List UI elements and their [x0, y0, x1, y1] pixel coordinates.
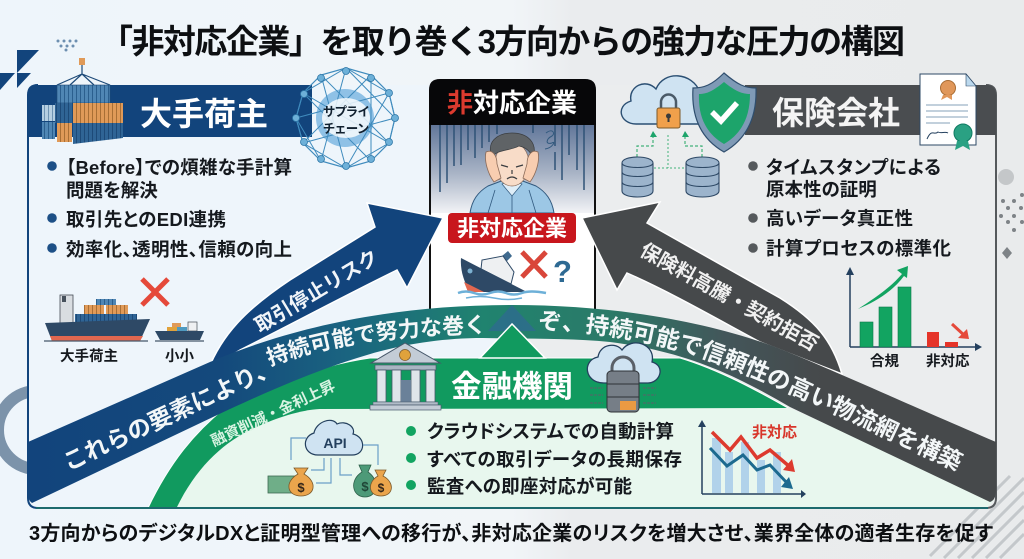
panel: 保険会社: [621, 73, 996, 370]
保険会社 heading: 保険会社: [772, 95, 900, 131]
icon: supply chain network: チェーン: [323, 122, 369, 136]
保険会社 bullet list: 計算プロセスの標準化: [766, 238, 951, 259]
panel: 大手荷主: [28, 58, 398, 365]
金融機関 bullet list: すべての取引データの長期保存: [427, 449, 682, 470]
bottom frame line: [36, 507, 988, 509]
保険会社 bullet list: [748, 157, 951, 259]
arrow: 保険会社 to center: [582, 202, 842, 374]
大手荷主 bullet list: 問題を解決: [66, 180, 158, 201]
icon: money bags: $: [378, 481, 385, 495]
融資削減・金利上昇 arc label: 融資削減・金利上昇: [208, 377, 338, 450]
center red label: 非対応企業: [457, 216, 567, 241]
line chart: 非対応 decline: [698, 420, 806, 498]
center panel header: [429, 79, 596, 125]
小小 label: 小小: [165, 348, 194, 365]
icon: data storage with dashed links: [622, 131, 719, 197]
light lower region: [177, 408, 994, 507]
icon: cloud with padlock: [621, 76, 700, 128]
大手荷主 ship label: 大手荷主: [60, 347, 118, 365]
bar chart: 合規 vs 非対応: [846, 266, 982, 370]
icon: stressed person: [470, 131, 554, 213]
icon: green shield with check: [693, 73, 756, 152]
非対応 label: 非対応: [926, 352, 970, 370]
大手荷主 heading: 大手荷主: [140, 96, 268, 132]
panel: 金融機関 green arch: [36, 325, 994, 508]
保険会社 bullet list: 原本性の証明: [766, 179, 877, 200]
center panel heading: 非対応企業: [447, 88, 577, 118]
icon: stacked containers: [42, 58, 123, 144]
保険料高騰・契約拒否 arrow label: 保険料高騰・契約拒否: [636, 239, 822, 356]
icon: money bags: $: [297, 480, 305, 495]
footer summary: 3方向からのデジタルDXと証明型管理への移行が、非対応企業のリスクを増大させ、業界全体の適者生存を促す: [29, 521, 993, 545]
center pointer: [488, 305, 536, 331]
decorative corner triangles: [0, 50, 39, 90]
panel: outer frame: [28, 85, 996, 508]
icon: bank: [370, 343, 441, 410]
icon: API cloud: [305, 420, 363, 455]
icon: supply chain network: [292, 68, 398, 170]
保険会社 bullet list: タイムスタンプによる: [766, 157, 941, 178]
icon: API cloud: API: [323, 435, 347, 451]
center panel body: [430, 100, 595, 310]
大手荷主 bullet list: 効率化、透明性、信頼の向上: [66, 239, 292, 260]
サプライチェーン label: サプライ: [323, 105, 370, 119]
decorative dots top left: [56, 40, 78, 52]
banner: center arc: [29, 305, 996, 503]
icon: certificate document: [920, 74, 976, 150]
arch tip: [480, 324, 545, 358]
保険会社 header bar: [745, 85, 996, 135]
大手荷主 bullet list: 取引先とのEDI連携: [66, 209, 226, 230]
banner text middle: 持続可能で努力な巻く: [266, 314, 481, 367]
banner text right: ぞ、持続可能で信頼性の高い物流網を構築: [540, 311, 964, 472]
decorative dots right: [998, 169, 1024, 259]
panel: 金融機関 contents: [208, 343, 806, 498]
金融機関 heading: 金融機関: [451, 370, 573, 404]
金融機関 bullet list: [406, 421, 682, 497]
大手荷主 bullet list: 【Before】での煩雑な手計算: [66, 157, 292, 178]
red trend arrow: [952, 324, 965, 336]
icon: red cross on ship: [522, 252, 546, 277]
取引停止リスク arrow label: 取引停止リスク: [251, 246, 383, 337]
金融機関 bullet list: クラウドシステムでの自動計算: [427, 421, 674, 442]
金融機関 bullet list: 監査への即座対応が可能: [427, 476, 632, 497]
合規 label: 合規: [870, 353, 899, 370]
icon: money bags: [268, 465, 391, 497]
green trend arrow: [858, 266, 908, 309]
panel: 非対応企業 (center): [429, 79, 596, 310]
rain background: [431, 125, 594, 213]
大手荷主 bullet list: [47, 157, 292, 260]
icon: small ship: [155, 322, 204, 341]
icon: red cross: [142, 279, 168, 305]
banner text left: これらの要素により、: [65, 369, 266, 468]
非対応 chart label: 非対応: [752, 423, 797, 441]
icon: money bags: $: [361, 479, 369, 494]
question mark: ?: [553, 254, 572, 289]
保険会社 bullet list: 高いデータ真正性: [766, 208, 913, 229]
decorative ring left: [0, 391, 76, 469]
icon: large cargo ship: [44, 295, 150, 341]
icon: sinking ship: [458, 251, 546, 300]
decorative stripes bottom right: [930, 476, 1024, 558]
arrow: 大手荷主 to center: [208, 203, 443, 370]
大手荷主 header bar: [28, 85, 312, 137]
icon: API data connectors: [291, 438, 378, 483]
title: 「非対応企業」を取り巻く3方向からの強力な圧力の構図: [100, 23, 905, 60]
rain lines: [440, 125, 584, 192]
icon: cloud with padlock server: [587, 343, 660, 412]
